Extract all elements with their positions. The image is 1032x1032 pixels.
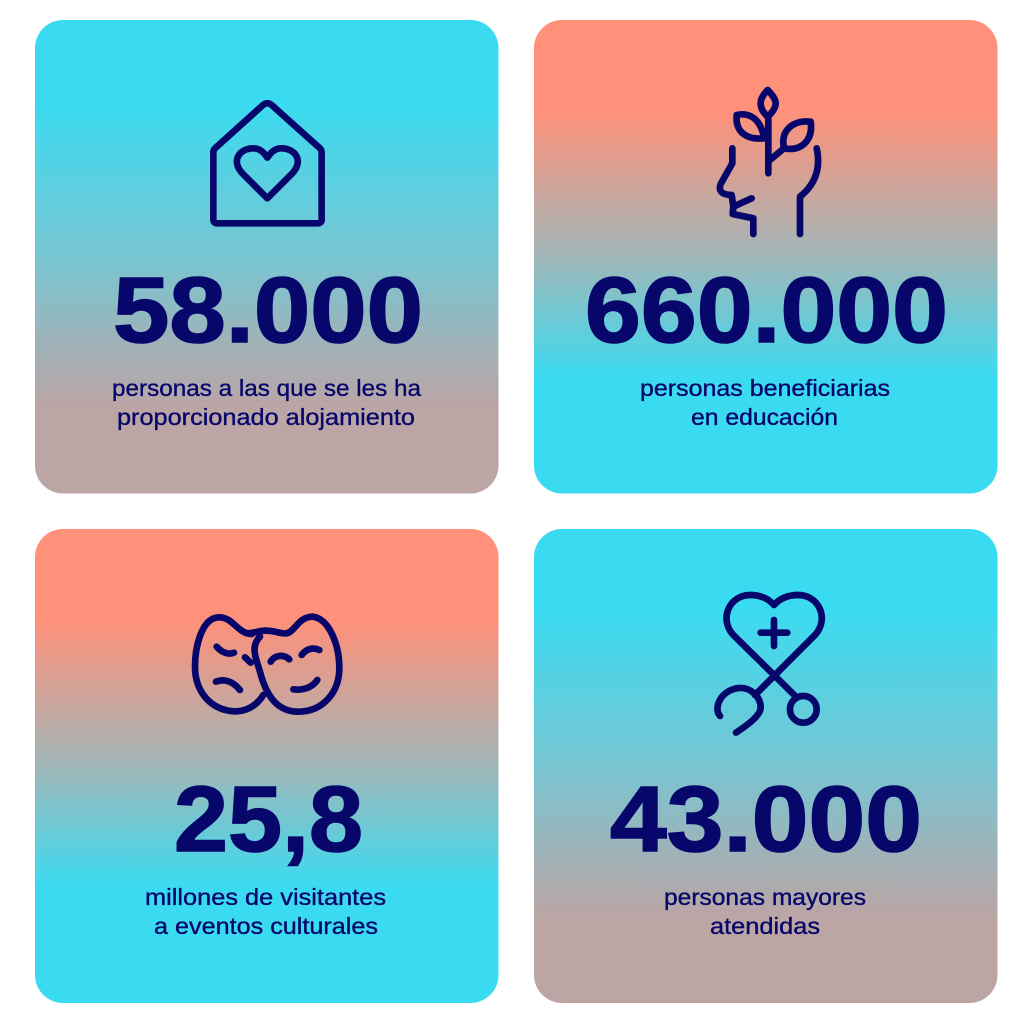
text: eventos culturales description <box>145 884 386 939</box>
text: personas mayores description: atendidas <box>710 913 820 939</box>
icon: house with heart <box>213 103 322 223</box>
number: 25,8: 25,8 <box>174 767 363 871</box>
text: alojamiento description: personas a las que se les ha <box>112 375 421 401</box>
panel background: eventos culturales <box>35 529 498 1003</box>
text: educación description: personas beneficiarias <box>640 375 890 401</box>
text: personas mayores description <box>664 884 866 939</box>
text: eventos culturales description: a eventos culturales <box>154 913 378 939</box>
number: 58.000: 58.000 <box>113 258 423 362</box>
icon: stethoscope heart <box>717 595 822 733</box>
panel background: educación <box>534 20 998 494</box>
text: alojamiento description: proporcionado alojamiento <box>117 404 415 430</box>
icon: head with sprout <box>720 90 818 234</box>
panel: eventos culturales <box>35 529 498 1003</box>
panel: alojamiento <box>35 20 498 494</box>
icon: theatre masks <box>195 617 339 712</box>
text: eventos culturales description: millones de visitantes <box>145 884 386 910</box>
number: 660.000: 660.000 <box>585 258 948 362</box>
panel background: alojamiento <box>35 20 498 494</box>
text: educación description: en educación <box>691 404 838 430</box>
text: educación description <box>640 375 890 430</box>
number: 43.000: 43.000 <box>610 767 922 871</box>
panel: educación <box>534 20 998 494</box>
text: personas mayores description: personas mayores <box>664 884 866 910</box>
text: alojamiento description <box>112 375 421 430</box>
panel background: personas mayores <box>534 529 998 1003</box>
panel: personas mayores <box>534 529 998 1003</box>
